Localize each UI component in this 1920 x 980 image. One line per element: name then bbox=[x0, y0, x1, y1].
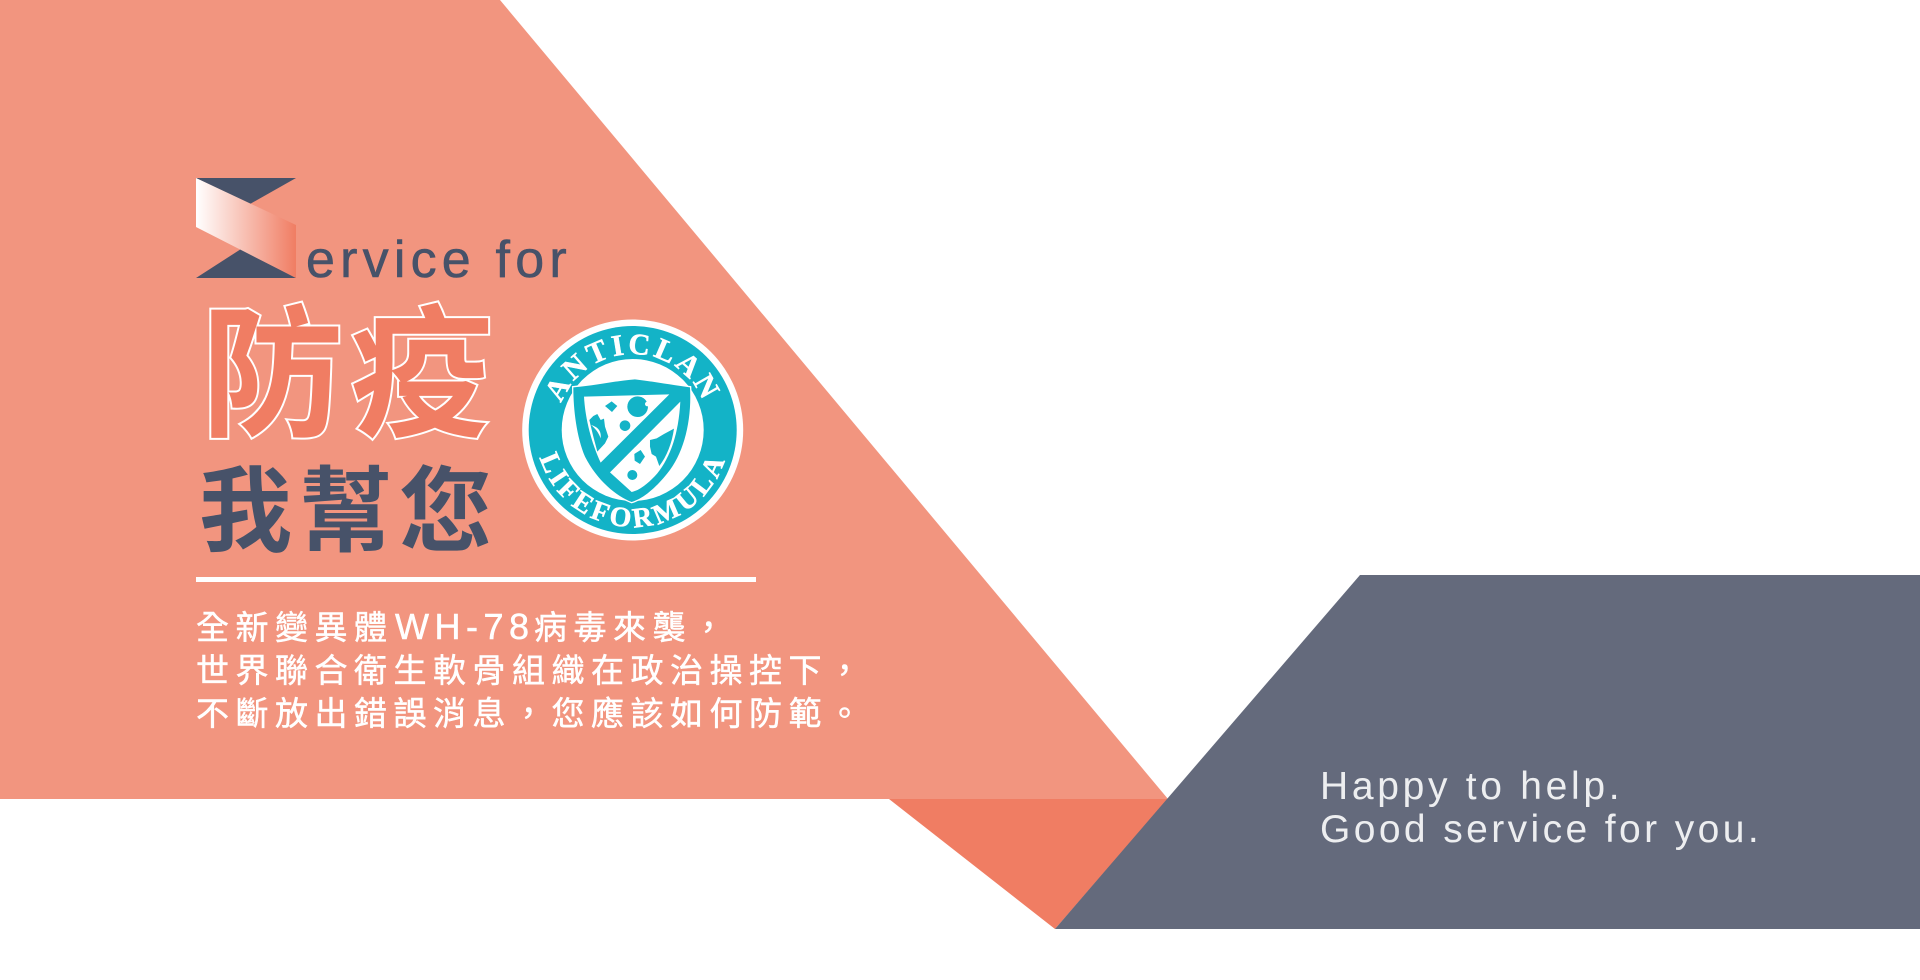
heading: Service for: ervice for bbox=[306, 231, 572, 289]
text block: description bbox=[196, 601, 868, 735]
heading: 防疫 outlined: 疫 bbox=[350, 260, 493, 467]
heading: 防疫 outlined: 防 bbox=[201, 260, 344, 467]
heading: 防疫 outlined: 防 bbox=[201, 260, 344, 467]
panel: salmon background shape bbox=[0, 0, 1168, 799]
panel: slate grey shape bbox=[1055, 575, 1920, 929]
text block: description: WH-78 bbox=[395, 606, 535, 647]
text block: tagline bbox=[1320, 765, 1762, 851]
heading: 防疫 outlined: 疫 bbox=[350, 260, 493, 467]
divider line bbox=[196, 577, 756, 582]
icon: ribbon S logo bbox=[196, 178, 296, 278]
badge text: ANTICLAN: ANTICLAN bbox=[548, 334, 720, 404]
text block: description: 病毒來襲， bbox=[534, 601, 732, 649]
heading: 防疫 outlined bbox=[201, 260, 493, 467]
text block: description: 世界聯合衛生軟骨組織在政治操控下， bbox=[196, 644, 868, 692]
text block: description: 全新變異體 bbox=[196, 601, 394, 649]
shape: dark coral fold triangle bbox=[889, 799, 1168, 929]
badge text: LIFEFORMULA: LIFEFORMULA bbox=[539, 450, 726, 528]
text block: tagline: Happy to help. bbox=[1320, 765, 1623, 808]
text block: description: 不斷放出錯誤消息，您應該如何防範。 bbox=[196, 687, 868, 735]
icon: pizza shield bbox=[573, 379, 690, 502]
icon: Anticlan Lifeformula badge bbox=[522, 320, 744, 540]
heading: 我幫您: 我幫您 bbox=[199, 436, 499, 571]
text block: tagline: Good service for you. bbox=[1320, 808, 1762, 851]
